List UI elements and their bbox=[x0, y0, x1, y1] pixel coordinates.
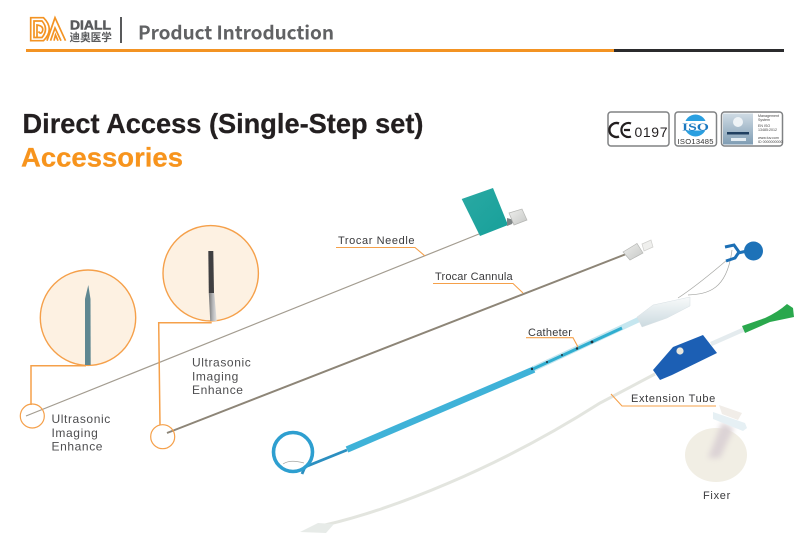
magnified circle bbox=[40, 270, 136, 365]
magnified circle bbox=[163, 226, 258, 321]
cannula tip dark bbox=[208, 251, 214, 293]
logo text bbox=[70, 18, 112, 45]
badge: ISO 13485 bbox=[675, 112, 716, 146]
leader line bbox=[31, 366, 86, 405]
logo text: 迪奥医学 bbox=[70, 30, 112, 45]
catheter main body bbox=[347, 370, 534, 450]
logo text: DIALL bbox=[70, 18, 111, 32]
fixer bbox=[685, 405, 747, 482]
badge: ISO 13485: ISO bbox=[682, 122, 710, 134]
fixer disc bbox=[685, 428, 747, 482]
pigtail tail bbox=[302, 450, 347, 474]
clip ball bbox=[744, 242, 763, 260]
label: trocar cannula bbox=[433, 271, 523, 293]
cannula shaft bbox=[167, 254, 625, 433]
label: ultrasonic imaging enhance right: Enhance bbox=[192, 383, 244, 397]
trocar needle bbox=[26, 188, 527, 416]
extension tube bbox=[300, 304, 794, 533]
leader line bbox=[159, 323, 212, 425]
label: ultrasonic imaging enhance right: Imaging bbox=[192, 370, 239, 384]
cannula hub bbox=[623, 244, 643, 260]
label: ultrasonic imaging enhance right: Ultrasonic bbox=[192, 356, 251, 370]
needle hub bbox=[509, 209, 527, 225]
blue clamp bbox=[653, 335, 717, 380]
detail callout: cannula tip bbox=[151, 226, 258, 449]
cannula tip metal bbox=[209, 293, 217, 321]
badge: TUV certified: ID 0000000000 bbox=[758, 140, 783, 144]
loop string bbox=[283, 461, 304, 464]
label: ultrasonic imaging enhance left: Enhance bbox=[52, 440, 103, 454]
badge: TUV certified bbox=[722, 112, 783, 146]
small marker circle bbox=[20, 404, 44, 428]
label: trocar cannula: Trocar Cannula bbox=[435, 271, 513, 283]
label: catheter bbox=[526, 327, 578, 347]
header bbox=[31, 17, 334, 46]
fixer inner shadow bbox=[708, 422, 734, 458]
label: ultrasonic imaging enhance right bbox=[192, 356, 251, 397]
badge: CE 0197: 0197 bbox=[634, 124, 668, 140]
pigtail loop bbox=[274, 432, 312, 472]
header divider bbox=[120, 17, 122, 43]
label: ultrasonic imaging enhance left: Ultrasonic bbox=[52, 412, 111, 426]
long white tube bbox=[325, 374, 655, 525]
trocar cannula bbox=[167, 240, 653, 433]
needle flag handle bbox=[462, 188, 508, 236]
badge: CE 0197 bbox=[608, 112, 669, 146]
badge: TUV certified: System bbox=[758, 118, 770, 122]
catheter bbox=[274, 242, 763, 474]
label: trocar needle: Trocar Needle bbox=[338, 235, 415, 247]
heading: product introduction: Product Introduction bbox=[138, 18, 334, 46]
label: trocar needle bbox=[336, 235, 425, 256]
label: extension tube: Extension Tube bbox=[631, 393, 716, 405]
title: Direct Access (Single-Step set) bbox=[22, 108, 424, 139]
fixer wings bbox=[713, 412, 747, 431]
needle shaft bbox=[26, 234, 479, 416]
green funnel bbox=[742, 304, 794, 333]
tube end connector bbox=[300, 523, 334, 533]
needle hub stem bbox=[507, 218, 514, 226]
needle tip image bbox=[85, 285, 91, 365]
badge: TUV certified: Management bbox=[758, 114, 779, 118]
logo mark bbox=[31, 18, 66, 41]
blue clip bbox=[725, 245, 739, 261]
subtitle: Accessories bbox=[21, 142, 183, 172]
badge: ISO 13485: ISO13485 bbox=[678, 137, 714, 146]
header rule bbox=[26, 49, 784, 52]
small marker circle bbox=[151, 425, 175, 449]
label: fixer: Fixer bbox=[703, 490, 731, 502]
label: ultrasonic imaging enhance left bbox=[52, 412, 111, 454]
label: ultrasonic imaging enhance left: Imaging bbox=[52, 426, 98, 440]
label: catheter: Catheter bbox=[528, 327, 572, 339]
catheter drain holes bbox=[531, 341, 593, 370]
upper tube bbox=[711, 329, 745, 344]
upper catheter tube bbox=[533, 319, 640, 369]
detail callout: needle tip bbox=[20, 270, 136, 428]
catheter connector bbox=[637, 297, 690, 327]
thin strings bbox=[678, 260, 727, 298]
badge: TUV certified: 13485:2012 bbox=[758, 128, 777, 132]
certifications bbox=[608, 112, 783, 146]
cannula nose bbox=[642, 240, 653, 251]
badge: TUV certified: EN ISO bbox=[758, 124, 770, 128]
badge: TUV certified: www.tuv.com bbox=[758, 136, 779, 140]
